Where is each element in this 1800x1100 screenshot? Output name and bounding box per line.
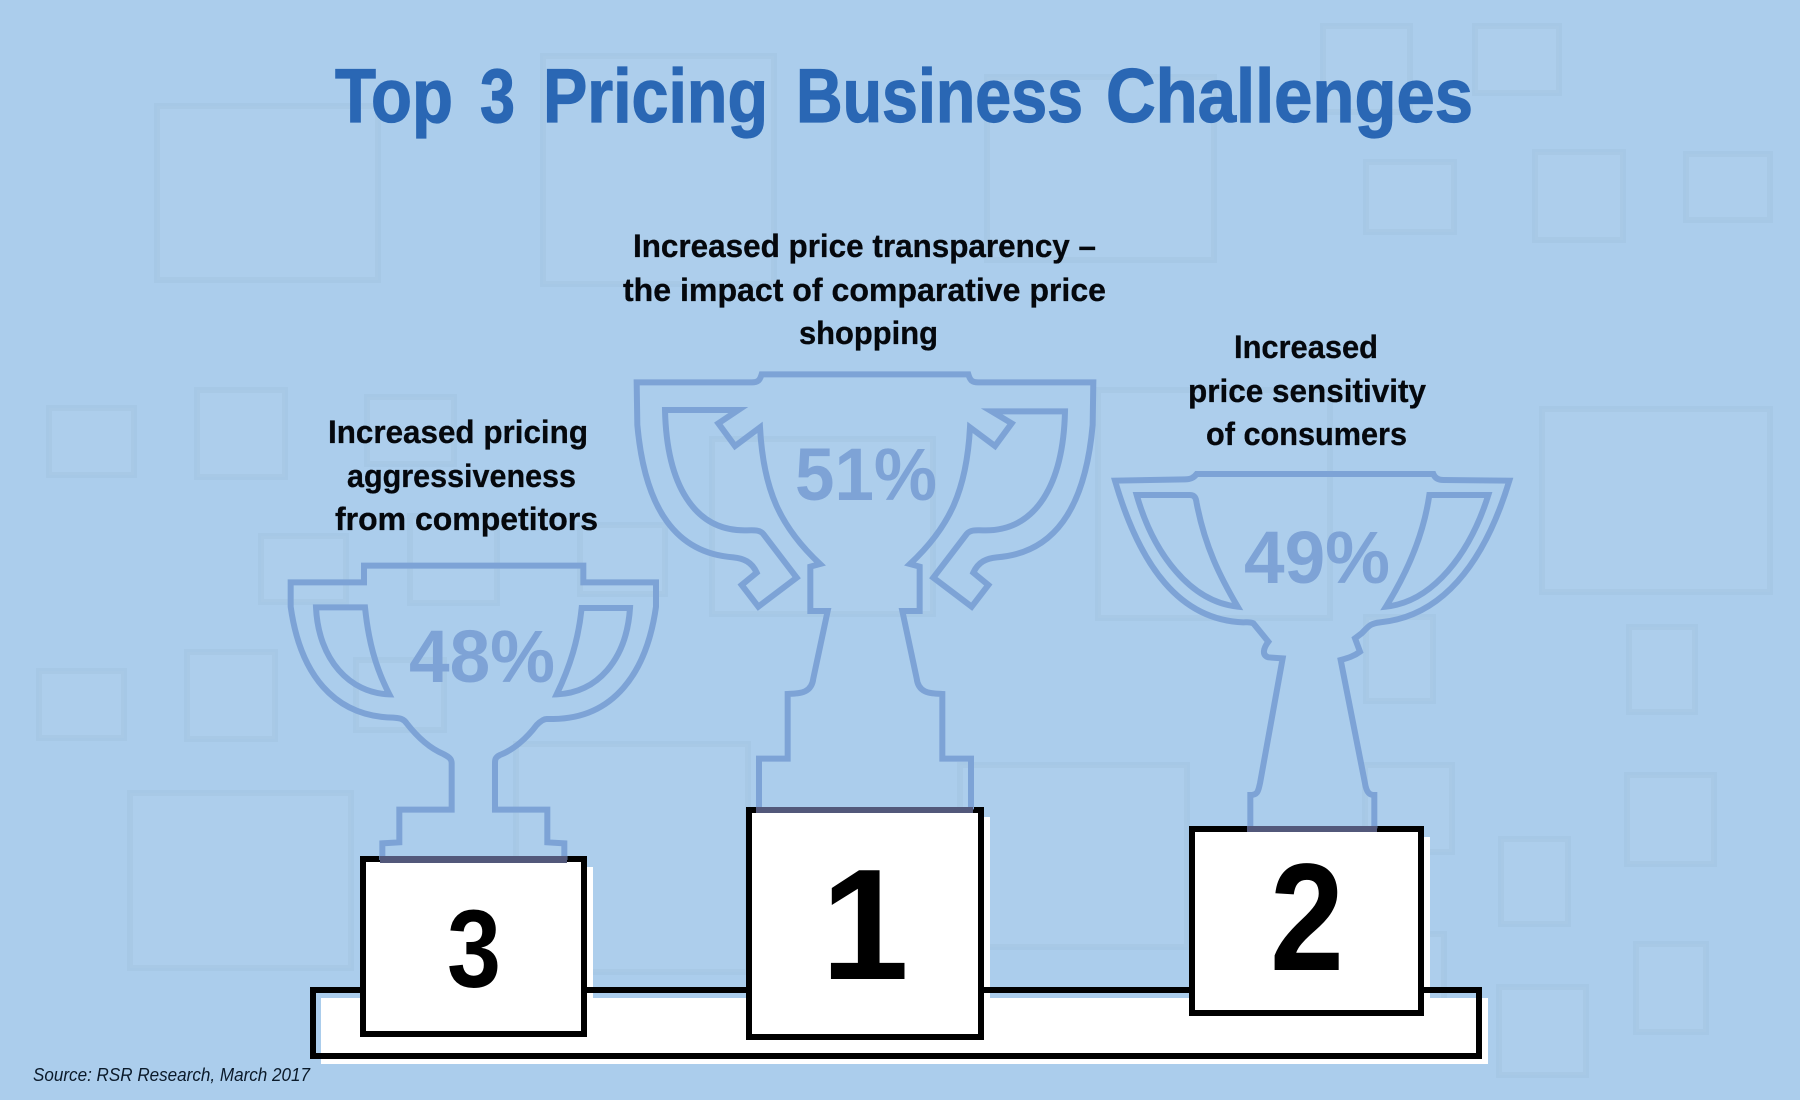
trophy: third place, 48% [291, 566, 656, 863]
title: 3 [480, 54, 515, 139]
podium block: 3rd place [363, 859, 584, 1034]
podium stage: third place, first place, second place with base platform [313, 810, 1488, 1064]
podium block: 2nd place: 2 [1270, 832, 1344, 1003]
label: second place challenge: price sensitivity [1188, 373, 1426, 409]
label: second place challenge [1188, 329, 1426, 452]
podium block: 1st place [749, 810, 981, 1037]
label: third place challenge [328, 414, 598, 537]
title: Top [335, 54, 453, 139]
percentage: 51%: 51% [795, 433, 937, 516]
label: second place challenge: Increased [1234, 329, 1378, 365]
podium block: 1st place: 1 [821, 837, 909, 1013]
podium block: 3rd place: 3 [447, 888, 501, 1011]
percentage: 49%: 49% [1244, 516, 1390, 599]
trophy: second place, 49% [1115, 474, 1509, 832]
label: first place challenge: the impact of comparative price [623, 272, 1106, 308]
label: first place challenge: shopping [799, 315, 938, 351]
base platform [313, 990, 1479, 1056]
title: Challenges [1106, 54, 1473, 139]
source note: Source: RSR Research, March 2017 [33, 1065, 311, 1085]
percentage: 48%: 48% [409, 615, 555, 698]
label: second place challenge: of consumers [1206, 416, 1407, 452]
title: Business [796, 54, 1083, 139]
label: third place challenge: Increased pricing [328, 414, 588, 450]
title: Pricing [543, 54, 768, 139]
trophy: first place, 51% [637, 374, 1093, 813]
label: first place challenge: Increased price transparency – [633, 228, 1096, 264]
label: third place challenge: aggressiveness [347, 458, 576, 494]
podium block: 2nd place [1192, 829, 1421, 1013]
label: first place challenge [623, 228, 1106, 351]
label: third place challenge: from competitors [335, 501, 598, 537]
